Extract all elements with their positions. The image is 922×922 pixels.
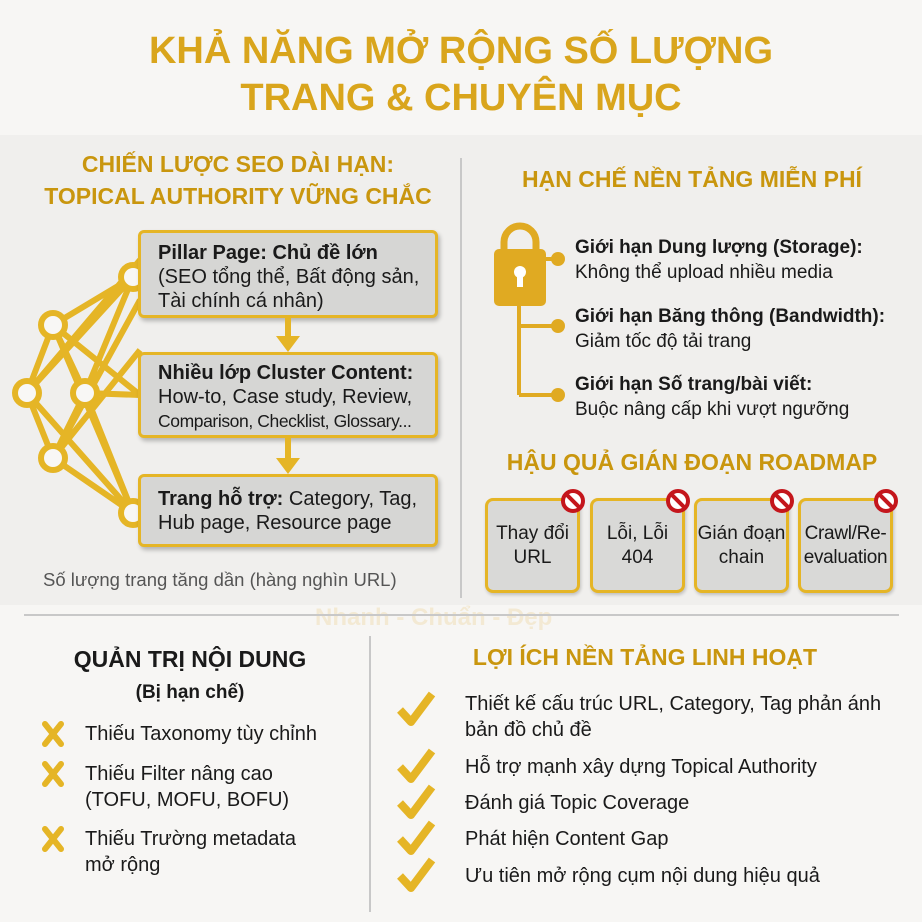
item: content gap xyxy=(397,820,668,855)
box: pillar page: Tài chính cá nhân) xyxy=(158,290,324,312)
list: limitations xyxy=(42,721,317,876)
box: 404 xyxy=(590,498,685,593)
heading: SEO strategy: CHIẾN LƯỢC SEO DÀI HẠN: xyxy=(82,151,394,177)
limit: storage xyxy=(575,237,863,283)
item: filter: Thiếu Filter nâng cao xyxy=(85,763,273,785)
box: 404: Lỗi, Lỗi xyxy=(607,522,668,544)
title xyxy=(149,29,773,119)
watermark: Nhanh - Chuẩn - Đẹp xyxy=(315,604,552,631)
limit: storage: Giới hạn Dung lượng (Storage): xyxy=(575,237,863,258)
list: benefits xyxy=(397,692,881,892)
limit: bandwidth: Giới hạn Băng thông (Bandwidth): xyxy=(575,306,885,327)
box: chain xyxy=(694,498,789,593)
consequence boxes xyxy=(484,489,898,596)
item: metadata xyxy=(42,826,296,876)
box: chain: chain xyxy=(719,546,764,568)
heading: SEO strategy: TOPICAL AUTHORITY VỮNG CHẮC xyxy=(44,183,432,209)
item: filter xyxy=(42,761,289,811)
heading: free platform limits: HẠN CHẾ NỀN TẢNG MIỄN PHÍ xyxy=(522,166,862,192)
item: content gap: Phát hiện Content Gap xyxy=(465,828,668,850)
box: pillar page: Pillar Page: Chủ đề lớn xyxy=(158,242,378,264)
item: URL structure: Thiết kế cấu trúc URL, Category, Tag phản ánh xyxy=(465,693,881,715)
box: chain: Gián đoạn xyxy=(698,522,785,544)
limit: pages: Buộc nâng cấp khi vượt ngưỡng xyxy=(575,399,849,420)
item: priority: Ưu tiên mở rộng cụm nội dung hiệu quả xyxy=(465,865,820,887)
box: pillar page: (SEO tổng thể, Bất động sản, xyxy=(158,266,419,288)
item: coverage: Đánh giá Topic Coverage xyxy=(465,792,689,814)
box: support pages: Hub page, Resource page xyxy=(158,512,392,534)
heading: SEO strategy xyxy=(44,151,432,209)
vertical divider xyxy=(460,158,462,598)
network diagram xyxy=(12,258,142,528)
box: URL change: URL xyxy=(513,546,552,568)
item: URL structure: bản đồ chủ đề xyxy=(465,719,592,741)
background panel xyxy=(0,135,922,605)
item: taxonomy: Thiếu Taxonomy tùy chỉnh xyxy=(85,723,317,745)
heading: content management: (Bị hạn chế) xyxy=(136,682,244,703)
box: crawl: evaluation xyxy=(804,546,887,568)
box: pillar page xyxy=(138,230,438,318)
limit: pages xyxy=(575,374,849,420)
item: metadata: mở rộng xyxy=(85,854,160,876)
box: 404: 404 xyxy=(622,546,653,568)
box: cluster content xyxy=(138,352,438,438)
heading: content management xyxy=(74,646,306,703)
item: topical authority xyxy=(397,748,817,783)
item: coverage xyxy=(397,784,689,819)
arrow down 2 xyxy=(276,438,300,474)
box: crawl: Crawl/Re- xyxy=(805,522,886,544)
box: cluster content: Comparison, Checklist, Glossary... xyxy=(158,411,412,431)
box: URL change: Thay đổi xyxy=(496,522,569,544)
limit: pages: Giới hạn Số trang/bài viết: xyxy=(575,374,812,395)
box: cluster content: How-to, Case study, Review, xyxy=(158,386,412,408)
box: support pages xyxy=(138,474,438,547)
box: support pages: Trang hỗ trợ: Category, Tag, xyxy=(158,488,417,510)
item: topical authority: Hỗ trợ mạnh xây dựng Topical Authority xyxy=(465,756,817,778)
heading: content management: QUẢN TRỊ NỘI DUNG xyxy=(74,646,306,672)
limit: bandwidth xyxy=(575,306,885,352)
arrow down 1 xyxy=(276,318,300,352)
icon: lock tree xyxy=(494,222,565,402)
horizontal divider xyxy=(24,614,899,616)
item: metadata: Thiếu Trường metadata xyxy=(85,828,296,850)
title: KHẢ NĂNG MỞ RỘNG SỐ LƯỢNG xyxy=(149,30,773,72)
heading: flexible benefits: LỢI ÍCH NỀN TẢNG LINH HOẠT xyxy=(473,644,817,670)
item: URL structure xyxy=(397,692,881,741)
heading: roadmap consequences: HẬU QUẢ GIÁN ĐOẠN ROADMAP xyxy=(507,449,877,475)
caption: Số lượng trang tăng dần (hàng nghìn URL) xyxy=(43,569,397,590)
title: TRANG & CHUYÊN MỤC xyxy=(240,77,682,119)
item: filter: (TOFU, MOFU, BOFU) xyxy=(85,789,289,811)
box: cluster content: Nhiều lớp Cluster Content: xyxy=(158,362,413,384)
limit: storage: Không thể upload nhiều media xyxy=(575,262,833,283)
item: priority xyxy=(397,858,820,892)
limit: bandwidth: Giảm tốc độ tải trang xyxy=(575,331,751,352)
box: URL change xyxy=(485,498,580,593)
box: crawl xyxy=(798,498,893,593)
